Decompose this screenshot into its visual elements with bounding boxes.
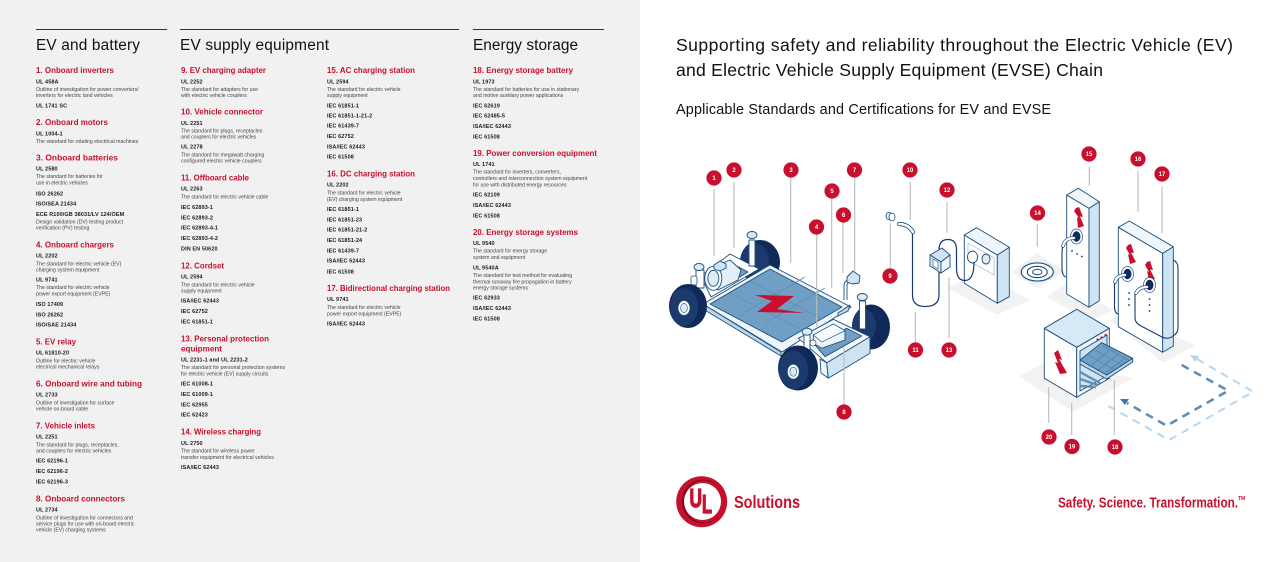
title: and Electric Vehicle Supply Equipment (EVSE) Chain xyxy=(676,60,1103,80)
section 8: onboard connectors xyxy=(36,493,135,534)
section 13: personal protection equipment: IEC 61008-1 xyxy=(181,382,213,388)
section 7: vehicle inlets: The standard for plugs, receptacles, xyxy=(36,442,119,448)
section 6: onboard wire and tubing: UL 2733 xyxy=(36,393,58,399)
section 4: onboard chargers: ISO 17409 xyxy=(36,302,63,308)
section 3: onboard batteries: The standard for batteries for xyxy=(36,174,103,180)
number markers: 14 xyxy=(1034,211,1041,217)
number markers xyxy=(706,146,1170,455)
icon: bolts xyxy=(1126,244,1155,281)
section 11: offboard cable xyxy=(181,172,268,253)
section 20: energy storage systems: system and equipment xyxy=(473,255,526,261)
icon: front far wheel xyxy=(852,304,890,350)
section 13: personal protection equipment: The standard for personal protection systems xyxy=(181,365,285,371)
section 13: personal protection equipment: equipment xyxy=(181,343,222,353)
section 7: vehicle inlets: and couplers for electric vehicles xyxy=(36,448,112,454)
heading: EV and battery: EV and battery xyxy=(36,37,140,54)
icon: rear frame and motor xyxy=(701,254,759,297)
section 13: personal protection equipment: for electric vehicle (EV) supply circuits xyxy=(181,372,269,378)
section 15: AC charging station: supply equipment xyxy=(327,93,368,99)
section 11: offboard cable: DIN EN 50620 xyxy=(181,247,218,253)
section 12: cordset xyxy=(181,260,255,325)
section 15: AC charging station: IEC 61851-1 xyxy=(327,103,359,109)
number markers: 13 xyxy=(946,348,953,354)
section 14: wireless charging: The standard for wireless power xyxy=(181,449,255,455)
section 3: onboard batteries: ISO 26262 xyxy=(36,191,63,197)
section 15: AC charging station xyxy=(327,65,415,161)
section 10: vehicle connector: and couplers for electric vehicles xyxy=(181,135,257,141)
column: Energy storage xyxy=(473,29,604,323)
title: Supporting safety and reliability throughout the Electric Vehicle (EV) xyxy=(676,35,1233,55)
section 4: onboard chargers: UL 9741 xyxy=(36,278,58,284)
section 7: vehicle inlets: IEC 62196-3 xyxy=(36,479,68,485)
section 12: cordset: IEC 62752 xyxy=(181,309,208,315)
logo: UL Solutions: Solutions xyxy=(734,492,800,512)
section 18: energy storage battery: 18. Energy storage battery xyxy=(473,65,573,75)
section 4: onboard chargers: ISO 26262 xyxy=(36,312,63,318)
section 4: onboard chargers: UL 2202 xyxy=(36,254,58,260)
icon: front right wheel xyxy=(778,346,818,390)
column: EV supply equipment xyxy=(180,29,459,471)
section 4: onboard chargers: 4. Onboard chargers xyxy=(36,240,114,250)
section 20: energy storage systems: IEC 61508 xyxy=(473,317,500,323)
icon: connector handle xyxy=(899,224,913,232)
icon: lightning bolt xyxy=(755,295,804,313)
section 17: bidirectional charging station: power export equipment (EVPE) xyxy=(327,312,402,318)
number markers: 3 xyxy=(789,168,793,174)
section 5: EV relay: UL 61810-20 xyxy=(36,351,69,357)
section 10: vehicle connector: The standard for megawatt charging xyxy=(181,152,264,158)
section 20: energy storage systems: The standard for energy storage xyxy=(473,249,547,255)
section 13: personal protection equipment: IEC 62423 xyxy=(181,413,208,419)
section 16: DC charging station: 16. DC charging station xyxy=(327,169,415,179)
arrow: outer power flow xyxy=(1108,355,1253,440)
section 2: onboard motors: UL 1004-1 xyxy=(36,131,63,137)
section 4: onboard chargers: The standard for electric vehicle (EV) xyxy=(36,261,122,267)
section 20: energy storage systems: ISA/IEC 62443 xyxy=(473,306,511,312)
section 10: vehicle connector: UL 2278 xyxy=(181,145,203,151)
section 4: onboard chargers: The standard for electric vehicle xyxy=(36,285,110,291)
section 5: EV relay: Outline for electric vehicle xyxy=(36,359,96,365)
icon: front frame and onboard charger xyxy=(798,271,870,378)
section 4: onboard chargers: power export equipment (EVPE) xyxy=(36,292,111,298)
section 8: onboard connectors: vehicle (EV) charging systems xyxy=(36,528,106,534)
section 15: AC charging station: 15. AC charging station xyxy=(327,65,415,75)
number markers: 4 xyxy=(815,225,819,231)
icon: sockets and cables xyxy=(1114,260,1178,338)
number markers: 6 xyxy=(842,213,846,219)
section 4: onboard chargers: charging system equipment xyxy=(36,268,100,274)
section 15: AC charging station: IEC 61439-7 xyxy=(327,124,359,130)
icon: status lights xyxy=(1096,334,1107,341)
section 15: AC charging station: IEC 62752 xyxy=(327,134,354,140)
logo: UL Solutions: U xyxy=(690,483,702,513)
icon: front left wheel xyxy=(669,284,707,328)
icon: battery frame xyxy=(703,265,851,356)
section 9: EV charging adapter: 9. EV charging adapter xyxy=(181,65,267,75)
section 1: onboard inverters xyxy=(36,65,139,109)
section 9: EV charging adapter: UL 2252 xyxy=(181,79,203,85)
number markers: 7 xyxy=(853,168,857,174)
section 8: onboard connectors: 8. Onboard connectors xyxy=(36,493,125,503)
heading: EV supply equipment: EV supply equipment xyxy=(180,37,330,54)
section 14: wireless charging: UL 2750 xyxy=(181,441,203,447)
number markers: 15 xyxy=(1086,152,1093,158)
section 8: onboard connectors: Outline of investigation for connectors and xyxy=(36,515,133,521)
icon: protection box xyxy=(930,248,950,273)
section 20: energy storage systems: The standard for test method for evaluating xyxy=(473,273,572,279)
section 6: onboard wire and tubing: 6. Onboard wire and tubing xyxy=(36,378,142,388)
illustration: AC charging station xyxy=(1047,188,1113,322)
section 17: bidirectional charging station: ISA/IEC 62443 xyxy=(327,322,365,328)
section 15: AC charging station: ISA/IEC 62443 xyxy=(327,144,365,150)
heading: Energy storage: Energy storage xyxy=(473,37,578,54)
section 1: onboard inverters: 1. Onboard inverters xyxy=(36,65,114,75)
section 7: vehicle inlets: UL 2251 xyxy=(36,434,58,440)
section 3: onboard batteries: ECE R100/GB 38031/LV 124/OEM xyxy=(36,212,125,218)
section 18: energy storage battery: IEC 62485-5 xyxy=(473,114,505,120)
section 20: energy storage systems: UL 9540 xyxy=(473,241,495,247)
logo: UL Solutions xyxy=(676,476,800,527)
section 7: vehicle inlets: IEC 62196-1 xyxy=(36,459,68,465)
section 19: power conversion equipment: IEC 61508 xyxy=(473,213,500,219)
section 1: onboard inverters: UL 458A xyxy=(36,79,59,85)
section 6: onboard wire and tubing: Outline of investigation for surface xyxy=(36,400,115,406)
section 13: personal protection equipment: 13. Personal protection xyxy=(181,334,269,344)
section 15: AC charging station: IEC 61508 xyxy=(327,155,354,161)
section 11: offboard cable: 11. Offboard cable xyxy=(181,172,249,182)
number markers: 17 xyxy=(1159,172,1166,178)
arrow: inner power flow xyxy=(1120,365,1228,426)
illustration: energy storage cabinet xyxy=(1019,309,1133,412)
illustration: EV chassis xyxy=(669,232,890,390)
section 18: energy storage battery xyxy=(473,65,580,140)
section 10: vehicle connector: configured electric vehicle couplers xyxy=(181,159,262,165)
section 16: DC charging station: (EV) charging system equipment xyxy=(327,197,403,203)
section 15: AC charging station: The standard for electric vehicle xyxy=(327,87,401,93)
title xyxy=(676,35,1233,80)
section 10: vehicle connector: The standard for plugs, receptacles xyxy=(181,128,263,134)
section 3: onboard batteries: Design validation (DV) testing product xyxy=(36,220,124,226)
icon: wall box xyxy=(964,228,1009,303)
icon: shelves xyxy=(1080,372,1100,387)
section 16: DC charging station: IEC 61508 xyxy=(327,269,354,275)
illustration: wall charger with cable xyxy=(886,212,1030,315)
section 19: power conversion equipment: controllers and interconnection system equipment xyxy=(473,176,588,182)
section 16: DC charging station: UL 2202 xyxy=(327,183,349,189)
section 7: vehicle inlets: 7. Vehicle inlets xyxy=(36,420,95,430)
section 11: offboard cable: The standard for electric vehicle cable xyxy=(181,195,268,201)
section 11: offboard cable: IEC 62893-4-2 xyxy=(181,236,218,242)
section 3: onboard batteries: use in electric vehicles xyxy=(36,181,88,187)
section 20: energy storage systems: 20. Energy storage systems xyxy=(473,227,578,237)
section 13: personal protection equipment xyxy=(181,334,285,419)
number markers: 20 xyxy=(1046,435,1053,441)
section 16: DC charging station: The standard for electric vehicle xyxy=(327,191,401,197)
section 17: bidirectional charging station: 17. Bidirectional charging station xyxy=(327,283,450,293)
section 5: EV relay: electrical mechanical relays xyxy=(36,365,100,371)
section 18: energy storage battery: IEC 62619 xyxy=(473,103,500,109)
section 17: bidirectional charging station xyxy=(327,283,450,328)
icon: EV charging adapter xyxy=(886,212,895,221)
section 3: onboard batteries: verification (PV) testing xyxy=(36,226,89,232)
icon: offboard cable xyxy=(912,233,974,306)
section 13: personal protection equipment: IEC 61009-1 xyxy=(181,392,213,398)
icon: bolt xyxy=(1074,207,1084,228)
section 16: DC charging station: IEC 61851-23 xyxy=(327,217,362,223)
section 19: power conversion equipment: The standard for inverters, converters, xyxy=(473,170,561,176)
tagline: TM xyxy=(1238,496,1245,502)
section 10: vehicle connector: 10. Vehicle connector xyxy=(181,106,264,116)
icon: rear suspension xyxy=(691,232,757,288)
section 9: EV charging adapter: with electric vehicle couplers xyxy=(181,93,247,99)
section 2: onboard motors: 2. Onboard motors xyxy=(36,117,108,127)
icon: rear far wheel xyxy=(740,240,780,284)
section 1: onboard inverters: inverters for electric land vehicles xyxy=(36,93,113,99)
column: EV and battery xyxy=(36,29,167,534)
section 12: cordset: ISA/IEC 62443 xyxy=(181,299,219,305)
section 13: personal protection equipment: UL 2231-1 and UL 2231-2 xyxy=(181,357,248,363)
number markers: 12 xyxy=(944,188,951,194)
section 16: DC charging station: IEC 61439-7 xyxy=(327,248,359,254)
section 16: DC charging station: IEC 61851-1 xyxy=(327,207,359,213)
section 1: onboard inverters: Outline of investigation for power converters/ xyxy=(36,87,139,93)
section 20: energy storage systems: thermal runaway fire propagation in battery xyxy=(473,279,572,285)
section 18: energy storage battery: ISA/IEC 62443 xyxy=(473,124,511,130)
section 8: onboard connectors: service plugs for use with on-board electric xyxy=(36,521,135,527)
section 19: power conversion equipment: IEC 62109 xyxy=(473,193,500,199)
section 19: power conversion equipment: ISA/IEC 62443 xyxy=(473,203,511,209)
icon: bolt xyxy=(1054,350,1067,374)
section 4: onboard chargers xyxy=(36,240,122,329)
section 5: EV relay: 5. EV relay xyxy=(36,337,76,347)
section 12: cordset: UL 2594 xyxy=(181,275,204,281)
section 11: offboard cable: IEC 62893-4-1 xyxy=(181,226,218,232)
leader lines xyxy=(714,166,1162,435)
section 12: cordset: 12. Cordset xyxy=(181,260,224,270)
number markers: 2 xyxy=(732,168,736,174)
icon: socket and cable xyxy=(1062,229,1082,277)
section 10: vehicle connector: UL 2251 xyxy=(181,121,203,127)
section 3: onboard batteries: 3. Onboard batteries xyxy=(36,153,118,163)
section 2: onboard motors xyxy=(36,117,139,145)
section 4: onboard chargers: ISO/SAE 21434 xyxy=(36,323,77,329)
section 11: offboard cable: IEC 62893-1 xyxy=(181,205,213,211)
illustration: DC and bidirectional charging station xyxy=(1110,221,1195,363)
section 19: power conversion equipment xyxy=(473,148,597,219)
section 3: onboard batteries: UL 2580 xyxy=(36,167,58,173)
section 14: wireless charging: ISA/IEC 62443 xyxy=(181,465,219,471)
section 9: EV charging adapter: The standard for adapters for use xyxy=(181,87,258,93)
section 11: offboard cable: IEC 62893-2 xyxy=(181,215,213,221)
section 16: DC charging station: ISA/IEC 62443 xyxy=(327,259,365,265)
section 5: EV relay xyxy=(36,337,100,371)
section 15: AC charging station: IEC 61851-1-21-2 xyxy=(327,113,372,119)
section 14: wireless charging: 14. Wireless charging xyxy=(181,427,261,437)
section 15: AC charging station: UL 2594 xyxy=(327,79,350,85)
section 16: DC charging station: IEC 61851-21-2 xyxy=(327,228,367,234)
number markers: 9 xyxy=(888,274,892,280)
number markers: 8 xyxy=(842,410,846,416)
section 8: onboard connectors: UL 2734 xyxy=(36,508,59,514)
section 19: power conversion equipment: 19. Power conversion equipment xyxy=(473,148,597,158)
section 11: offboard cable: UL 2263 xyxy=(181,187,203,193)
section 20: energy storage systems xyxy=(473,227,578,323)
icon: battery tray xyxy=(1080,343,1133,379)
panel: standards list xyxy=(0,0,640,562)
number markers: 5 xyxy=(830,189,834,195)
section 13: personal protection equipment: IEC 62955 xyxy=(181,402,208,408)
number markers: 16 xyxy=(1135,157,1142,163)
section 16: DC charging station: IEC 61851-24 xyxy=(327,238,363,244)
illustration: wireless charging pad xyxy=(1012,253,1065,288)
section 18: energy storage battery: IEC 61508 xyxy=(473,134,500,140)
section 6: onboard wire and tubing xyxy=(36,378,142,412)
section 18: energy storage battery: UL 1973 xyxy=(473,79,495,85)
section 16: DC charging station xyxy=(327,169,415,275)
section 2: onboard motors: The standard for rotating electrical machines xyxy=(36,139,139,145)
number markers: 10 xyxy=(907,168,914,174)
section 20: energy storage systems: IEC 62933 xyxy=(473,296,500,302)
section 14: wireless charging: transfer equipment for electrical vehicles xyxy=(181,455,274,461)
number markers: 11 xyxy=(912,348,919,354)
section 20: energy storage systems: energy storage systems xyxy=(473,286,528,292)
number markers: 1 xyxy=(712,176,716,182)
section 9: EV charging adapter xyxy=(181,65,267,99)
number markers: 19 xyxy=(1069,445,1076,451)
section 10: vehicle connector xyxy=(181,106,264,165)
section 12: cordset: The standard for electric vehicle xyxy=(181,282,255,288)
section 18: energy storage battery: The standard for batteries for use in stationary xyxy=(473,87,580,93)
section 12: cordset: IEC 61851-1 xyxy=(181,319,213,325)
section 1: onboard inverters: UL 1741 SC xyxy=(36,103,67,109)
logo: UL Solutions: L xyxy=(702,489,712,519)
section 7: vehicle inlets xyxy=(36,420,119,485)
section 19: power conversion equipment: for use with distributed energy resources xyxy=(473,182,567,188)
section 19: power conversion equipment: UL 1741 xyxy=(473,162,495,168)
section 18: energy storage battery: and motive auxiliary power applications xyxy=(473,93,564,99)
subtitle: Applicable Standards and Certifications for EV and EVSE xyxy=(676,102,1051,118)
section 20: energy storage systems: UL 9540A xyxy=(473,265,499,271)
section 3: onboard batteries xyxy=(36,153,125,232)
section 17: bidirectional charging station: The standard for electric vehicle xyxy=(327,305,401,311)
section 7: vehicle inlets: IEC 62196-2 xyxy=(36,469,68,475)
section 14: wireless charging xyxy=(181,427,274,471)
section 17: bidirectional charging station: UL 9741 xyxy=(327,297,349,303)
section 12: cordset: supply equipment xyxy=(181,288,222,294)
number markers: 18 xyxy=(1112,445,1119,451)
section 6: onboard wire and tubing: vehicle on-board cable xyxy=(36,406,88,412)
section 3: onboard batteries: ISO/SEA 21434 xyxy=(36,202,77,208)
